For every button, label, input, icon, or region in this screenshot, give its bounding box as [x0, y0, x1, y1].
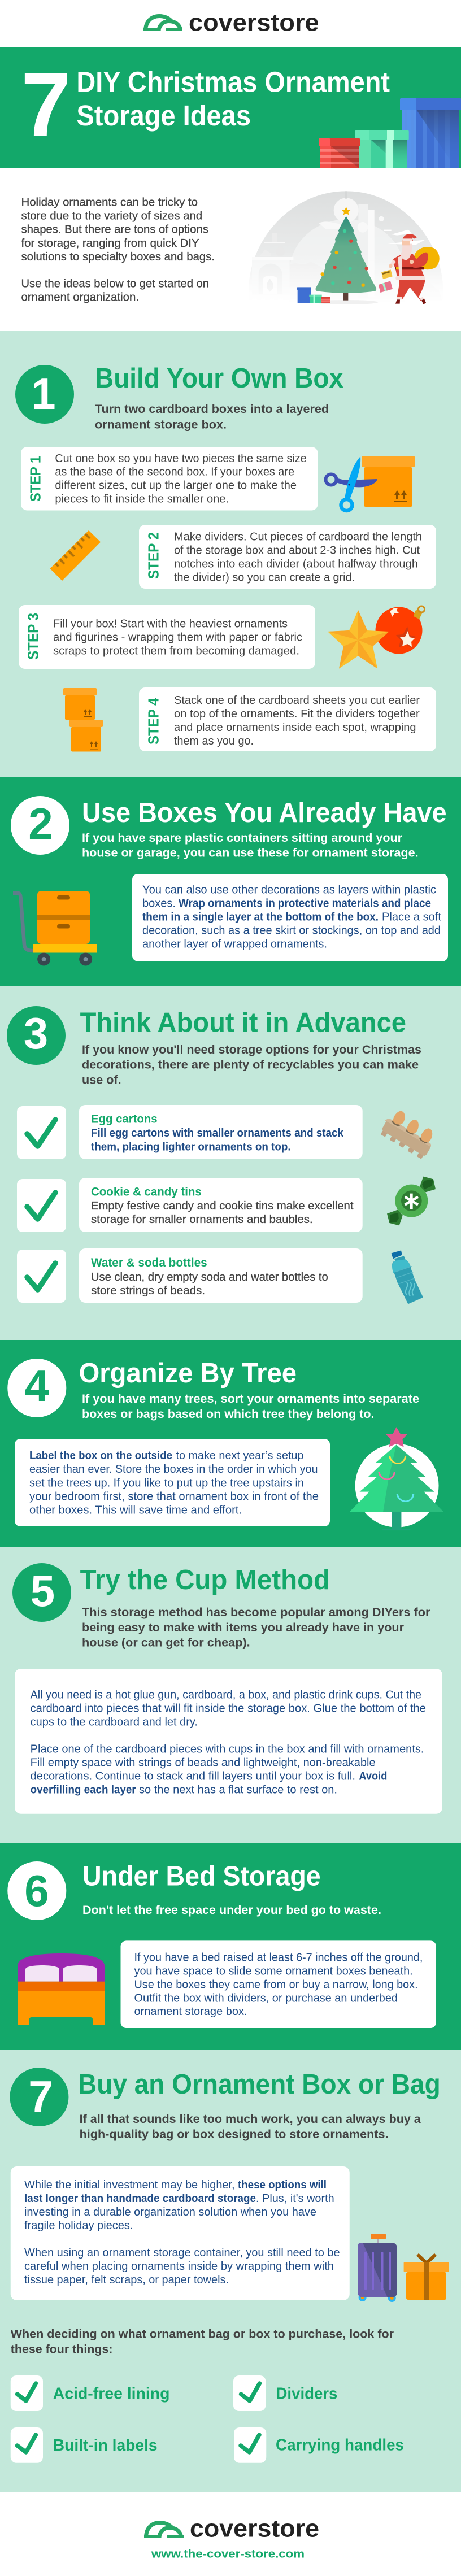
check item: cookie and candy tins	[17, 1178, 363, 1232]
small gifts under tree	[297, 287, 330, 303]
check item: water and soda bottles: Use clean, dry empty soda and water bottles to	[91, 1271, 328, 1283]
website url: www.the-cover-store.com	[151, 2548, 305, 2561]
text card: If you have a bed raised at least 6-7 inches off the ground,	[134, 1951, 423, 1964]
icon: gift box	[404, 2255, 449, 2300]
closing paragraph	[11, 2327, 394, 2356]
number badge 3: 3	[24, 1008, 48, 1058]
panel: idea 6 under bed storage	[0, 1843, 461, 2050]
subheading: decorations, there are plenty of recyclables you can make	[82, 1058, 419, 1072]
tree	[315, 207, 376, 301]
header logo	[143, 9, 319, 36]
subheading: boxes or bags based on which tree they belong to.	[82, 1407, 374, 1421]
intro text: store due to the variety of sizes and	[21, 210, 202, 223]
text card: investing in a durable organization solution when you have	[24, 2206, 316, 2218]
number badge 1: 1	[31, 369, 56, 419]
text card: other boxes. This will save time and effort.	[29, 1504, 242, 1517]
icon: coverstore dome	[143, 16, 182, 31]
feature: built-in labels	[11, 2427, 158, 2463]
step 3 card: Fill your box! Start with the heaviest ornaments	[53, 618, 288, 630]
subheading: Don't let the free space under your bed go to waste.	[82, 1903, 381, 1917]
text card: When using an ornament storage container, you still need to be	[24, 2247, 340, 2259]
subheading: If all that sounds like too much work, you can always buy a	[80, 2112, 421, 2126]
text card: fragile holiday pieces.	[24, 2220, 133, 2232]
text card	[15, 1669, 442, 1814]
step 1 card	[21, 447, 318, 511]
heading: Build Your Own Box	[95, 363, 343, 394]
text card: decorations. Continue to stack and fill layers until your box is full.	[31, 1770, 355, 1783]
title banner	[0, 47, 461, 168]
text card: last longer than handmade cardboard storage	[24, 2192, 256, 2205]
text card: them in a single layer at the bottom of the box.	[142, 911, 379, 924]
intro text: ornament organization.	[21, 291, 139, 304]
number badge 4	[7, 1359, 66, 1417]
closing paragraph: When deciding on what ornament bag or box to purchase, look for	[11, 2327, 394, 2341]
step 2 card: Make dividers. Cut pieces of cardboard the length	[174, 531, 422, 543]
number badge 7: 7	[28, 2072, 53, 2121]
step 3 card: STEP 3	[25, 613, 42, 660]
step 2 card: of the storage box and about 2-3 inches high. Cut	[174, 545, 420, 557]
intro text: Use the ideas below to get started on	[21, 278, 209, 290]
number badge 4: 4	[24, 1361, 49, 1411]
icon: bed	[18, 1953, 105, 2025]
text card: boxes.	[142, 898, 176, 910]
text card: Use the boxes they came from or buy a narrow, long box.	[134, 1978, 418, 1991]
step 4 card	[139, 687, 436, 751]
number badge 5	[12, 1563, 71, 1622]
footer logo	[144, 2515, 319, 2543]
step 1 card: Cut one box so you have two pieces the same size	[55, 452, 307, 465]
text card: careful when placing ornaments inside by wrapping them with	[24, 2260, 334, 2273]
text card: cups to the cardboard and let dry.	[31, 1716, 198, 1729]
title	[76, 66, 390, 132]
text card: cardboard into pieces that will fit inside the storage box. Glue the bottom of the	[31, 1703, 426, 1715]
icon: scissors cutting a box	[325, 456, 415, 511]
subheading: use of.	[82, 1073, 121, 1087]
step 2 card: STEP 2	[145, 532, 162, 579]
subheading: house or garage, you can use these for ornament storage.	[82, 846, 419, 860]
subheading	[82, 1392, 419, 1421]
panel: idea 2 use boxes you already have	[0, 777, 461, 986]
text card: set the trees up. If you like to put up the tree upstairs in	[29, 1477, 304, 1489]
step 3 card: and figurines - wrapping them with paper or fabric	[53, 632, 302, 644]
check item: water and soda bottles: Water & soda bottles	[91, 1256, 207, 1269]
check item: cookie and candy tins: storage for smaller ornaments and baubles.	[91, 1213, 313, 1226]
Santa	[389, 234, 440, 304]
subheading	[82, 1043, 421, 1087]
dome backdrop	[247, 191, 444, 305]
subheading: high-quality bag or box designed to store ornaments.	[80, 2127, 389, 2141]
text card: overfilling each layer	[31, 1784, 136, 1796]
icon: stacked boxes	[63, 688, 103, 751]
closing paragraph: these four things:	[11, 2343, 113, 2356]
icon: wrapped candy	[387, 1177, 436, 1225]
brand name: coverstore	[189, 9, 319, 36]
big number 7: 7	[21, 54, 71, 155]
check item: water and soda bottles: store strings of beads.	[91, 1285, 205, 1297]
intro text: for storage, ranging from quick DIY	[21, 237, 199, 250]
step 3 card: scraps to protect them from becoming damaged.	[53, 645, 299, 658]
text card: Fill empty space with strings of beads and lightweight, non-breakable	[31, 1757, 376, 1769]
text card: . Plus, it's worth	[256, 2192, 334, 2205]
text card: tissue paper, felt scraps, or paper towels.	[24, 2274, 229, 2286]
heading: Think About it in Advance	[80, 1008, 406, 1038]
title: DIY Christmas Ornament	[76, 66, 390, 98]
text card: ornament storage box.	[134, 2005, 247, 2018]
number badge 2: 2	[28, 799, 53, 848]
number badge 1	[15, 365, 74, 424]
feature: dividers	[233, 2375, 337, 2411]
subheading	[80, 2112, 421, 2141]
icon: decorated tree	[350, 1427, 443, 1530]
text card: decoration, such as a tree skirt or stockings, on top and add	[142, 925, 441, 937]
check item: egg cartons: them, placing lighter ornaments on top.	[91, 1141, 291, 1153]
step 2 card: notches into each divider (about halfway through	[174, 558, 418, 571]
text card: another layer of wrapped ornaments.	[142, 938, 327, 951]
feature: acid-free lining	[11, 2375, 169, 2411]
icon: ruler	[50, 530, 101, 581]
text card: Label the box on the outside	[29, 1450, 172, 1462]
icon: bauble	[375, 606, 425, 654]
step 4 card: and place ornaments inside each spot, wrapping	[174, 721, 416, 734]
panel: idea 1 build your own box	[0, 331, 461, 777]
text card: All you need is a hot glue gun, cardboard, a box, and plastic drink cups. Cut the	[31, 1689, 421, 1701]
intro text: solutions to specialty boxes and bags.	[21, 251, 215, 263]
check item: egg cartons: Fill egg cartons with smaller ornaments and stack	[91, 1127, 344, 1139]
panel: idea 5 try the cup method	[0, 1547, 461, 1843]
subheading: This storage method has become popular among DIYers for	[82, 1605, 430, 1619]
intro text: shapes. But there are tons of options	[21, 224, 208, 236]
text card: you have space to slide some ornament boxes beneath.	[134, 1965, 413, 1977]
subheading: If you have many trees, sort your ornaments into separate	[82, 1392, 419, 1406]
heading: Organize By Tree	[79, 1358, 297, 1389]
heading: Try the Cup Method	[80, 1565, 330, 1595]
feature: carrying handles	[234, 2427, 404, 2463]
subheading: If you have spare plastic containers sitting around your	[82, 831, 403, 845]
text card: your bedroom first, store that ornament box in front of the	[29, 1490, 319, 1503]
step 1 card: pieces to fit inside the smaller one.	[55, 493, 229, 506]
panel: idea 7 buy an ornament box or bag	[0, 2050, 461, 2492]
icon: stacked gift boxes	[319, 98, 461, 168]
brand name: coverstore	[190, 2515, 319, 2543]
icons: egg carton, candy, bottle	[381, 1111, 436, 1304]
number badge 6	[7, 1861, 66, 1920]
check item: cookie and candy tins: Empty festive candy and cookie tins make excellent	[91, 1200, 354, 1212]
check item: egg cartons: Egg cartons	[91, 1112, 158, 1125]
feature: built-in labels: Built-in labels	[53, 2436, 158, 2455]
step 1 card: different sizes, cut up the larger one to make the	[55, 480, 297, 492]
text card	[132, 874, 448, 961]
text card	[15, 1439, 330, 1526]
text card: so the next has a flat surface to rest on.	[139, 1784, 337, 1796]
heading: Under Bed Storage	[82, 1861, 321, 1891]
icon: water bottle	[392, 1250, 423, 1304]
icon: gold star	[328, 610, 389, 669]
step 3 card	[19, 605, 315, 669]
heading: Use Boxes You Already Have	[82, 798, 447, 828]
text card: these options will	[238, 2179, 327, 2191]
step 2 card: the divider) so you can create a grid.	[174, 572, 355, 584]
heading: Buy an Ornament Box or Bag	[78, 2069, 441, 2100]
text card	[121, 1940, 436, 2028]
title: Storage Ideas	[76, 99, 251, 132]
text card: Avoid	[359, 1770, 387, 1783]
falling gifts	[379, 269, 393, 293]
feature: carrying handles: Carrying handles	[276, 2436, 404, 2455]
subheading: house (or can get for cheap).	[82, 1636, 250, 1650]
step 1 card: STEP 1	[27, 456, 44, 502]
step 4 card: them as you go.	[174, 735, 254, 747]
text card: Wrap ornaments in protective materials and place	[179, 898, 431, 910]
step 1 card: as the base of the second box. If your boxes are	[55, 466, 294, 478]
check item: cookie and candy tins: Cookie & candy tins	[91, 1185, 202, 1198]
check item: egg cartons	[17, 1105, 363, 1159]
step 4 card: on top of the ornaments. Fit the dividers together	[174, 708, 420, 720]
icon: coverstore dome	[144, 2523, 184, 2538]
illustration: Santa and Christmas tree in a dome	[247, 191, 444, 305]
subheading	[95, 402, 329, 432]
intro text	[21, 196, 215, 304]
number badge 5: 5	[31, 1566, 55, 1616]
text card: Place a soft	[382, 911, 441, 924]
subheading: Turn two cardboard boxes into a layered	[95, 402, 329, 416]
subheading: being easy to make with items you already have in your	[82, 1621, 405, 1634]
icon: hand cart with boxes	[13, 891, 97, 966]
text card: While the initial investment may be higher,	[24, 2179, 235, 2191]
check item: water and soda bottles	[17, 1248, 363, 1303]
text card: Place one of the cardboard pieces with cups in the box and fill with ornaments.	[31, 1743, 424, 1755]
step 4 card: STEP 4	[145, 698, 162, 745]
feature: dividers: Dividers	[276, 2385, 337, 2403]
intro text: Holiday ornaments can be tricky to	[21, 196, 198, 208]
number badge 7	[10, 2068, 68, 2126]
icon: egg carton	[381, 1111, 432, 1159]
step 4 card: Stack one of the cardboard sheets you cut earlier	[174, 694, 420, 707]
icon: suitcase	[358, 2234, 397, 2302]
text card: to make next year’s setup	[176, 1450, 304, 1462]
number badge 3	[7, 1006, 66, 1065]
subheading	[82, 1605, 430, 1650]
feature: acid-free lining: Acid-free lining	[53, 2385, 169, 2403]
number badge 2	[11, 796, 69, 855]
step 2 card	[139, 525, 436, 589]
panel: idea 4 organize by tree	[0, 1340, 461, 1547]
text card	[11, 2166, 350, 2300]
subheading: ornament storage box.	[95, 418, 227, 432]
subheading: If you know you'll need storage options for your Christmas	[82, 1043, 421, 1056]
subheading	[82, 831, 419, 860]
number badge 6: 6	[24, 1866, 49, 1916]
panel: idea 3 think about it in advance	[0, 986, 461, 1340]
text card: Outfit the box with dividers, or purchase an underbed	[134, 1992, 398, 2005]
text card: easier than ever. Store the boxes in the order in which you	[29, 1463, 318, 1476]
text card: You can also use other decorations as layers within plastic	[142, 884, 436, 897]
